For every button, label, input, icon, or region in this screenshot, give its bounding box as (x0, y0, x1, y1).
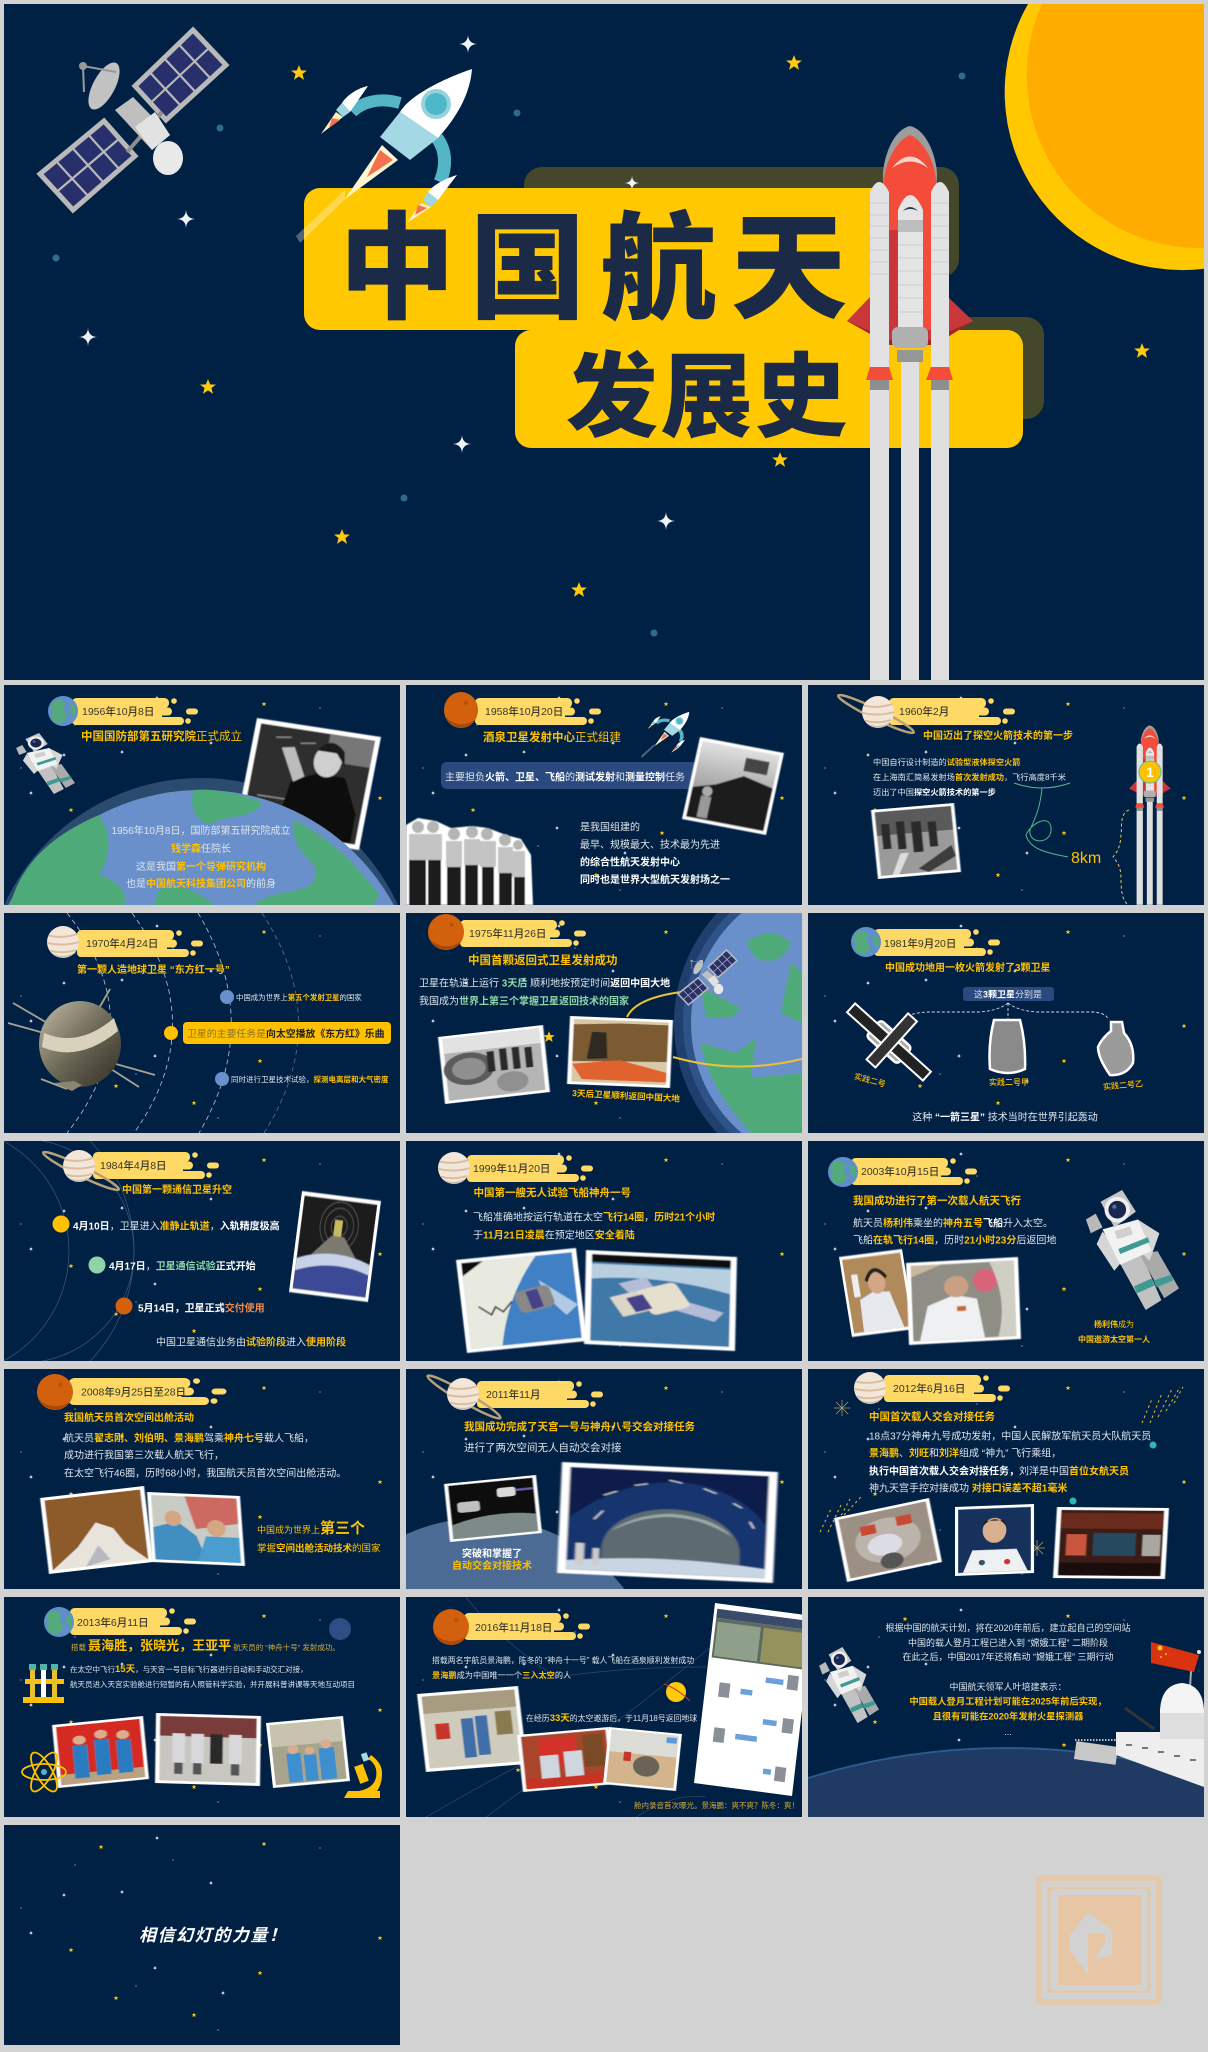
photo: spacesuit relief (40, 1486, 153, 1574)
icon: rocket with badge (1129, 725, 1171, 905)
body text: 在上海南汇简易发射场首次发射成功，飞行高度8千米 (873, 772, 1066, 782)
panel: 1960 (808, 685, 1204, 905)
callout: 中国成为世界上第三个 (257, 1519, 365, 1537)
photo: crew with officials (155, 1713, 261, 1786)
date banner: 2011年11月 (486, 1388, 540, 1401)
callout (257, 1519, 381, 1554)
body text: 景海鹏成为中国唯一一个三入太空的人 (432, 1670, 571, 1680)
dashed orbits (67, 913, 299, 1133)
body text: 进行了两次空间无人自动交会对接 (464, 1441, 622, 1454)
date banner: 1984年4月8日 (100, 1159, 167, 1172)
photo: landing capsule (603, 1727, 682, 1791)
panel: 1975 (406, 913, 802, 1133)
heading: 我国航天员首次空间出舱活动 (64, 1411, 194, 1424)
date banner (47, 926, 203, 958)
panel: 2016 (406, 1597, 802, 1817)
altitude label: 8km (1071, 850, 1101, 867)
date banner (425, 1372, 603, 1422)
satellite labels: 实践二号乙 (1103, 1078, 1143, 1092)
photo: rocket inspection (871, 803, 961, 879)
date banner (37, 1374, 226, 1410)
body text (473, 1210, 715, 1242)
panel: future plans (808, 1597, 1204, 1817)
body text: 同时也是世界大型航天发射场之一 (580, 873, 730, 886)
icon: satellite (678, 950, 737, 1005)
body text: ... (1004, 1727, 1012, 1737)
date banner: 2003年10月15日 (861, 1165, 939, 1178)
body text (853, 1216, 1056, 1246)
event 3: 5月14日，卫星正式交付使用 (138, 1302, 265, 1314)
body text (580, 820, 730, 886)
photo: orbital diagram (557, 1462, 778, 1583)
dashed height bracket (1113, 810, 1129, 905)
date banner (48, 696, 198, 726)
title panel: line 2: 发展史 (566, 347, 847, 449)
event 2 (88, 1256, 256, 1274)
icon: microscope (344, 1752, 382, 1798)
icon: rocket with badge: 1 (1146, 764, 1154, 780)
photo: crew seated (517, 1727, 615, 1792)
decoration: dash clusters and bursts (820, 1387, 1183, 1566)
body text: 是我国组建的 (580, 820, 640, 834)
panel: hero cover slide (4, 4, 1204, 680)
conclusion: 中国卫星通信业务由试验阶段进入使用阶段 (156, 1336, 346, 1348)
panel: 2013 (4, 1597, 400, 1817)
date banner: 2012年6月16日 (893, 1382, 965, 1395)
heading: 中国首次载人交会对接任务 (869, 1410, 995, 1423)
panel: 2012 (808, 1369, 1204, 1589)
body text: 飞船准确地按运行轨道在太空飞行14圈，历时21个小时 (473, 1210, 715, 1224)
body text (112, 824, 290, 890)
icon: gold planet (664, 1682, 690, 1702)
date banner: 1999年11月20日 (473, 1162, 550, 1175)
callout: 掌握空间出舱活动技术的国家 (257, 1542, 381, 1554)
icon: observatory (1074, 1683, 1204, 1787)
title panel: line 2 (515, 330, 1023, 449)
body text: 在太空中飞行15天，与天宫一号目标飞行器进行自动和手动交汇对接， (70, 1664, 308, 1675)
panel: 2011 (406, 1369, 802, 1589)
body text (885, 1622, 1131, 1737)
date banner (44, 1607, 196, 1637)
conclusion: 这种 “一箭三星” 技术当时在世界引起轰动 (912, 1110, 1098, 1124)
icon: small rocket (296, 69, 472, 243)
panel: 1970 (4, 913, 400, 1133)
caption: 中国遨游太空第一人 (1078, 1334, 1150, 1344)
body text: 执行中国首次载人交会对接任务，刘洋是中国首位女航天员 (869, 1464, 1129, 1478)
body text: 也是中国航天科技集团公司的前身 (126, 877, 276, 890)
blue planet (329, 1618, 351, 1640)
date banner: 1956年10月8日 (82, 705, 154, 718)
planet surface (808, 1747, 1204, 1817)
earth ring (0, 778, 417, 1210)
heading: 中国成功地用一枚火箭发射了3颗卫星 (885, 961, 1051, 974)
icon: astronaut (16, 733, 75, 794)
dashed connectors (906, 1003, 1108, 1019)
body text: 中国的载人登月工程已进入到 “嫦娥工程” 二期阶段 (908, 1637, 1108, 1648)
body text: 搭载两名宇航员景海鹏，陈冬的 “神舟十一号” 载人飞船在酒泉顺利发射成功 (432, 1655, 694, 1665)
panel: 2008 (4, 1369, 400, 1589)
label pill: 这3颗卫星分别是 (974, 988, 1042, 1000)
panel: 1984 (4, 1141, 400, 1361)
timeline item 3: 同时进行卫星技术试验，探测电离层和大气密度 (231, 1074, 389, 1084)
body text: 成功进行我国第三次载人航天飞行， (64, 1448, 224, 1462)
icon: satellite (40, 30, 226, 210)
date banner (438, 1152, 593, 1184)
event 2: 4月17日，卫星通信试验正式开始 (109, 1260, 256, 1272)
panel: 2003 (808, 1141, 1204, 1361)
heading: 我国成功进行了第一次载人航天飞行 (853, 1194, 1021, 1207)
body text: 中国自行设计制造的试验型液体探空火箭 (873, 757, 1020, 767)
icon: space shuttle (847, 126, 973, 680)
caption (1078, 1319, 1150, 1344)
photo: landing team (567, 1016, 673, 1088)
date banner: 1958年10月20日 (485, 705, 563, 718)
timeline item 2: 卫星的主要任务是向太空播放《东方红》乐曲 (187, 1027, 385, 1040)
photo: astronaut waving (839, 1249, 915, 1337)
icon: sun (1005, 4, 1204, 270)
satellite: Shijian-2B (1098, 1022, 1133, 1075)
watermark stamp (1039, 1878, 1159, 2002)
photo: crew in cabin (147, 1492, 245, 1566)
body text: 于11月21日凌晨在预定地区安全着陆 (473, 1228, 635, 1242)
timeline item 1: 中国成为世界上第五个发射卫星的国家 (236, 993, 362, 1002)
date banner: 1975年11月26日 (469, 927, 546, 940)
icon: astronaut (1086, 1190, 1179, 1310)
earth (674, 861, 998, 1185)
icon: rocket (641, 712, 689, 758)
orbit lines (426, 1597, 736, 1817)
photo: comms satellite (289, 1191, 381, 1302)
body text: 18点37分神舟九号成功发射，中国人民解放军航天员大队航天员 (869, 1430, 1151, 1442)
body text: 航天员杨利伟乘坐的神舟五号飞船升入太空。 (853, 1216, 1053, 1230)
heading: 中国国防部第五研究院正式成立 (81, 729, 242, 743)
title panel: line 1: 中国航天 (339, 204, 847, 334)
panel: closing slide (4, 1825, 400, 2045)
highlight bar: 主要担负火箭、卫星、飞船的测试发射和测量控制任务 (445, 770, 685, 784)
altitude annotation curve (1014, 783, 1070, 857)
body text: 我国成为世界上第三个掌握卫星返回技术的国家 (419, 994, 629, 1008)
body text: 航天员翟志刚、刘伯明、景海鹏驾乘神舟七号载人飞船， (64, 1432, 314, 1444)
heading: 我国成功完成了天宫一号与神舟八号交会对接任务 (464, 1420, 695, 1433)
satellite labels: 实践二号甲 (989, 1077, 1029, 1087)
icon: test tubes (23, 1664, 64, 1703)
body text: 景海鹏、刘旺和刘洋组成 “神九” 飞行乘组， (869, 1446, 1061, 1460)
satellite labels: 实践二号 (853, 1071, 887, 1089)
body text: 迈出了中国探空火箭技术的第一步 (873, 787, 996, 797)
caption: 3天后卫星顺利返回中国大地 (572, 1087, 681, 1104)
body text: 1956年10月8日，国防部第五研究院成立 (112, 824, 290, 837)
satellite Dongfanghong (8, 989, 155, 1091)
body text: 神九天宫手控对接成功 对接口误差不超1毫米 (869, 1482, 1067, 1494)
body text (873, 757, 1066, 797)
date banner: 1970年4月24日 (86, 937, 158, 950)
crew line: 搭载 聂海胜，张晓光，王亚平 航天员的 “神舟十号” 发射成功。 (71, 1638, 340, 1653)
event 1 (52, 1216, 280, 1232)
photo: docking (444, 1475, 542, 1542)
timeline item 2 (164, 1022, 391, 1044)
highlight bar (441, 762, 703, 789)
timeline item 3 (215, 1072, 389, 1086)
photo: spacecraft over earth (456, 1248, 587, 1353)
date banner (851, 927, 1000, 957)
date banner: 1960年2月 (899, 705, 949, 718)
photo: control centre (1053, 1507, 1169, 1579)
photo: Liu Yang portrait (955, 1504, 1034, 1576)
caption: 自动交会对接技术 (452, 1559, 532, 1572)
photo: spacecraft with solar panels (584, 1250, 737, 1351)
date banner (433, 1609, 590, 1645)
photo: capsule (438, 1025, 550, 1104)
hero starfield (52, 35, 1150, 636)
satellite: Shijian-2 (832, 983, 950, 1097)
label pill (963, 987, 1054, 1001)
photo: crew saluting (52, 1716, 149, 1788)
body text: 在此之后，中国2017年还将启动 “嫦娥工程” 三期行动 (902, 1651, 1114, 1662)
earth globe (0, 790, 420, 1228)
icon: flag (1151, 1642, 1201, 1687)
body text: 卫星在轨道上运行 3天后 顺利地按预定时间返回中国大地 (419, 976, 670, 990)
body text: 根据中国的航天计划，将在2020年前后，建立起自己的空间站 (885, 1622, 1131, 1633)
panel: 1958 (406, 685, 802, 905)
date banner (444, 692, 601, 728)
body text: 在太空飞行46圈，历时68小时，我国航天员首次空间出舱活动。 (64, 1466, 346, 1480)
panel: 1981 (808, 913, 1204, 1133)
photo: scientist at blackboard (235, 718, 381, 850)
icon: atom (22, 1749, 66, 1795)
panel: 1999 (406, 1141, 802, 1361)
body text: 中国载人登月工程计划可能在2025年前后实现， (909, 1696, 1107, 1706)
heading: 中国迈出了探空火箭技术的第一步 (923, 729, 1073, 742)
date banner (836, 691, 1015, 737)
date banner (428, 914, 586, 950)
heading: 酒泉卫星发射中心正式组建 (483, 730, 621, 744)
planet backdrop (301, 1518, 661, 1878)
event 3 (116, 1298, 265, 1314)
body text: 的综合性航天发射中心 (580, 856, 680, 868)
phone screenshot (694, 1603, 813, 1796)
body text: 这是我国第一个导弹研究机构 (136, 860, 266, 873)
body text: 飞船在轨飞行14圈，历时21小时23分后返回地 (853, 1234, 1056, 1246)
orbit arcs (0, 1091, 134, 1411)
date banner: 1981年9月20日 (884, 937, 956, 950)
photo: crew in module (834, 1498, 942, 1582)
icon: astronaut (819, 1647, 879, 1723)
caption (452, 1547, 532, 1572)
body text (432, 1655, 694, 1680)
date banner: 2016年11月18日 (475, 1621, 552, 1634)
panel: 1956 (4, 685, 400, 905)
body text: 中国航天领军人叶培建表示： (949, 1681, 1067, 1692)
photo: crew in Tiangong (266, 1716, 350, 1788)
orbit (627, 992, 802, 1067)
caption: 突破和掌握了 (462, 1547, 522, 1560)
timeline item 1 (220, 990, 362, 1004)
heading: 中国首颗返回式卫星发射成功 (468, 953, 618, 967)
caption: 杨利伟成为 (1094, 1319, 1134, 1329)
title backing panels (524, 167, 1044, 419)
body text (70, 1664, 355, 1689)
date banner: 2013年6月11日 (77, 1616, 149, 1629)
body text (64, 1432, 346, 1480)
photo: astronaut in capsule (906, 1257, 1021, 1345)
event 1: 4月10日，卫星进入准静止轨道，入轨精度极高 (73, 1220, 280, 1232)
photo: inside Tiangong (417, 1686, 527, 1772)
body text (869, 1430, 1151, 1494)
body text: 最早、规模最大、技术最为先进 (580, 838, 720, 851)
body text: 钱学森任院长 (171, 842, 231, 855)
closing message: 相信幻灯的力量！ (139, 1921, 286, 1946)
photo: group of people (406, 818, 533, 905)
satellite: Shijian-2A (990, 1020, 1025, 1073)
date banner (41, 1148, 219, 1194)
body text (419, 976, 670, 1008)
date banner (828, 1157, 977, 1187)
photo: launch site (682, 737, 784, 835)
heading: 中国第一艘无人试验飞船神舟一号 (474, 1186, 631, 1199)
date banner (854, 1372, 1010, 1404)
satellite labels (853, 1071, 1143, 1092)
date banner: 2008年9月25日至28日 (81, 1386, 186, 1398)
text: 33 days: 在经历33天的太空遨游后，于11月18号返回地球 (526, 1713, 697, 1724)
body text: 且很有可能在2020年发射火星探测器 (933, 1710, 1084, 1722)
body text: 航天员进入天宫实验舱进行短暂的有人照管科学实验，并开展科普讲课等天地互动项目 (70, 1679, 355, 1689)
heading: 第一颗人造地球卫星 “东方红一号” (77, 963, 230, 976)
caption: 舱内录音首次曝光。景海鹏：爽不爽？陈冬：爽！ (634, 1800, 799, 1810)
heading: 中国第一颗通信卫星升空 (122, 1183, 232, 1196)
